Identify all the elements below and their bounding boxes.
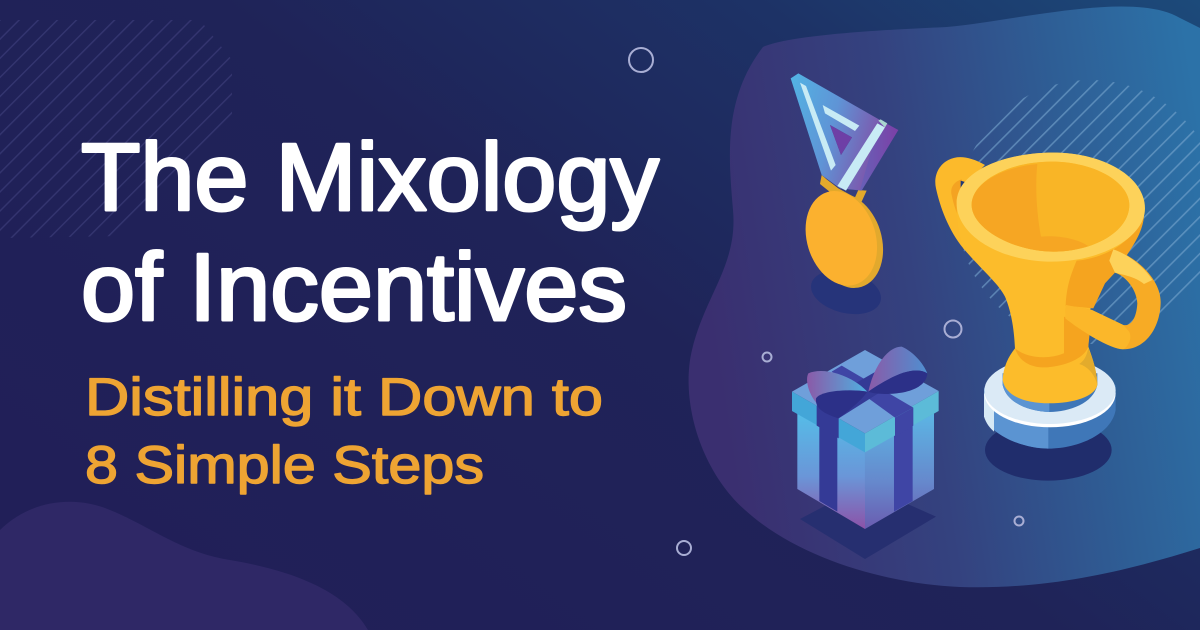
subtitle (85, 368, 603, 495)
icon: trophy (935, 153, 1161, 481)
gift bow (807, 347, 927, 418)
hatch pattern: right (958, 80, 1200, 344)
title (81, 124, 659, 341)
trophy left handle (935, 157, 1007, 277)
medal ribbon (791, 73, 898, 191)
background blob: right (689, 6, 1200, 587)
trophy shadow (985, 419, 1112, 481)
medal loop (820, 175, 867, 205)
medal disc (794, 182, 894, 297)
title: The Mixology (81, 124, 659, 231)
background blob: bottom left (0, 502, 368, 630)
gift lid (792, 350, 939, 452)
trophy right handle (1065, 249, 1161, 349)
trophy cup body (957, 153, 1144, 403)
gift box sides (797, 412, 934, 529)
icon: medal (791, 73, 898, 321)
trophy inner bowl (972, 162, 1129, 252)
trophy base (984, 357, 1116, 449)
icon: gift box (792, 347, 939, 559)
trophy rim (957, 153, 1145, 262)
gift shadow (800, 485, 936, 559)
decorative circles (629, 48, 1024, 555)
title: of Incentives (81, 234, 627, 341)
subtitle: 8 Simple Steps (85, 436, 484, 495)
medal shadow (806, 264, 886, 321)
subtitle: Distilling it Down to (85, 368, 603, 427)
trophy body shade (1015, 213, 1144, 385)
gift ribbon vertical (819, 422, 913, 512)
